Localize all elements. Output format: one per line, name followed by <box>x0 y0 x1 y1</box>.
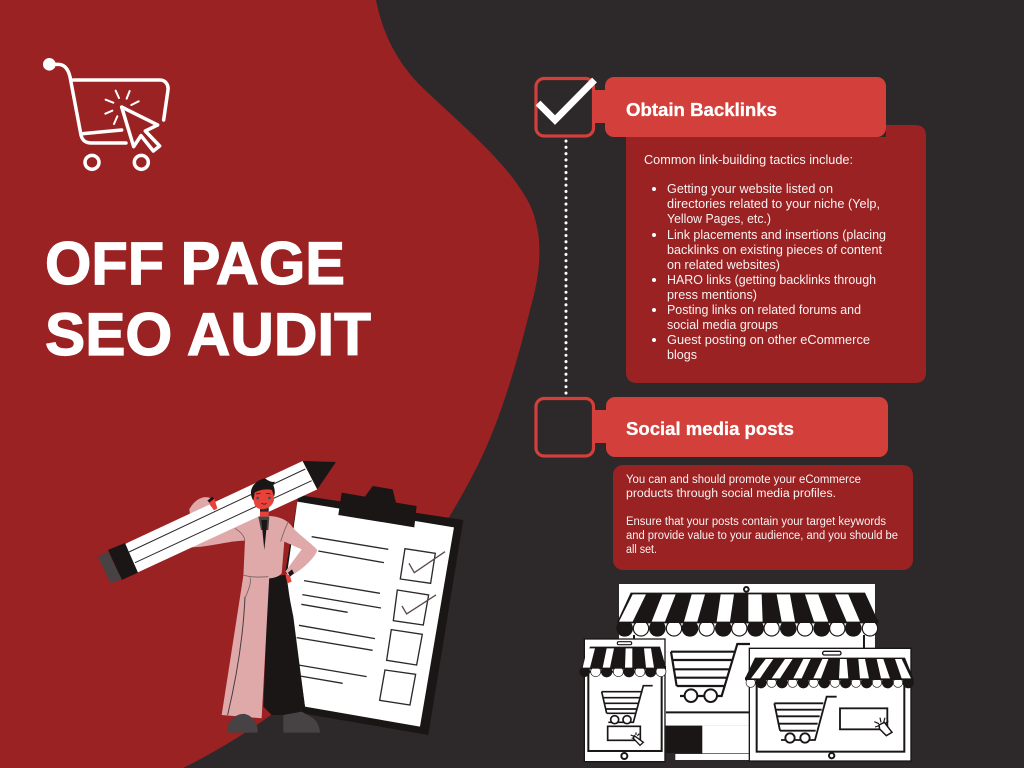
desktop store <box>616 584 878 726</box>
laptop store <box>745 648 914 761</box>
illustration: person with pencil and clipboard <box>98 461 463 735</box>
heading bar: Social media posts <box>593 397 888 457</box>
panel: social media text: products through social media profiles. <box>626 488 836 500</box>
panel: social media text <box>613 465 913 570</box>
bullet list: Link placements and insertions (placing <box>667 228 886 242</box>
red background shape <box>0 0 539 768</box>
bullet list: HARO links (getting backlinks through <box>667 273 876 287</box>
panel: social media text: You can and should promote your eCommerce <box>626 474 861 486</box>
tablet store <box>579 639 666 762</box>
title: OFF PAGE <box>45 230 345 297</box>
bullet list: press mentions) <box>667 288 757 302</box>
panel: social media text: and provide value to your audience, and you should be <box>626 530 898 542</box>
checklist item 2 checkbox <box>536 398 594 456</box>
panel: social media text: all set. <box>626 544 657 556</box>
bullet list: Yellow Pages, etc.) <box>667 212 771 226</box>
heading bar: Obtain Backlinks <box>593 77 886 137</box>
panel: backlinks tactics: Common link-building tactics include: <box>644 153 853 167</box>
person: legs and shoes <box>222 575 320 733</box>
bullet list: backlinks on existing pieces of content <box>667 243 883 257</box>
bullet list: Guest posting on other eCommerce <box>667 333 870 347</box>
bullet list: on related websites) <box>667 258 780 272</box>
bullet list: Posting links on related forums and <box>667 303 861 317</box>
panel: backlinks tactics <box>626 125 926 383</box>
person: torso and arms <box>189 497 317 598</box>
title: SEO AUDIT <box>45 301 371 368</box>
bullet list <box>652 182 886 362</box>
bullet list: directories related to your niche (Yelp, <box>667 197 880 211</box>
title <box>45 230 371 368</box>
pencil <box>98 461 336 583</box>
person: head and hands <box>207 478 294 583</box>
panel: social media text: Ensure that your posts contain your target keywords <box>626 516 886 528</box>
icon: shopping cart with cursor <box>43 58 168 169</box>
bullet list: blogs <box>667 348 697 362</box>
desktop stand and cart <box>666 644 751 760</box>
heading bar: Obtain Backlinks: Obtain Backlinks <box>626 100 777 120</box>
icon: check mark <box>538 80 594 120</box>
clipboard <box>263 486 463 735</box>
illustration: online stores on desktop, tablet and laptop <box>579 584 914 762</box>
connector: dotted line <box>564 141 568 396</box>
bullet list: Getting your website listed on <box>667 182 833 196</box>
checklist item 1 checkbox <box>536 78 594 136</box>
heading bar: Social media posts: Social media posts <box>626 419 794 439</box>
bullet list: social media groups <box>667 318 778 332</box>
